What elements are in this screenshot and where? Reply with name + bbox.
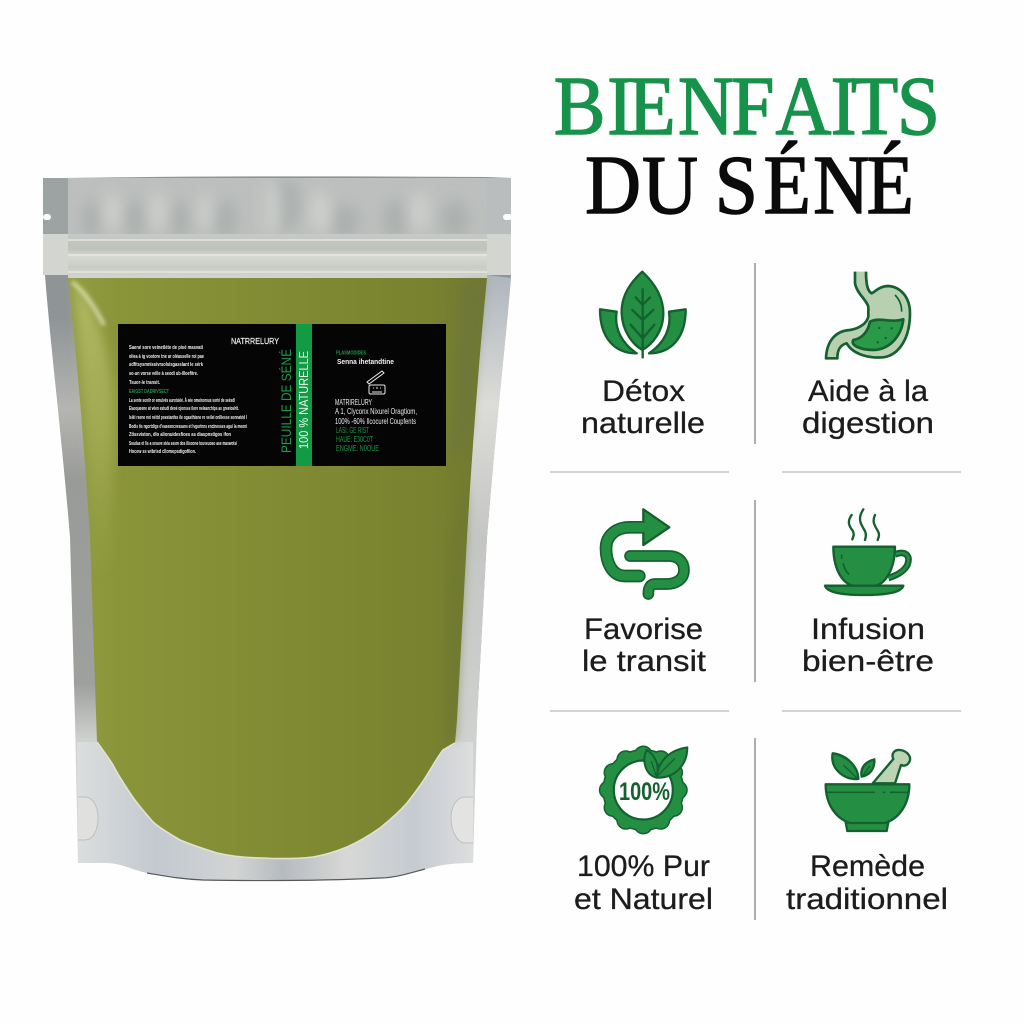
icon: 100% badge <box>599 746 688 834</box>
pouch body foil <box>43 176 511 881</box>
label description text: Isléi rsene noi néitd poestanfes ile ogasthisne re veilei onlliesse sonnatéd I <box>129 415 247 421</box>
botanical name: Senna ihetandtine <box>337 359 394 366</box>
label address block: 100% -60% Ilcocurel Coupfents <box>335 417 416 426</box>
label description text: EAIGST DADRIVSECT <box>129 389 169 395</box>
label: Aide à la <box>808 375 928 408</box>
bottom edge <box>147 869 425 881</box>
icon: mortar and pestle <box>826 750 910 831</box>
vertical natural claim: 100 % NATURELLE <box>296 351 311 449</box>
product label <box>118 324 446 466</box>
label: le transit <box>582 645 707 678</box>
benefit: infusion bien-être <box>802 509 934 678</box>
label description text: Hocew ss wibrisd cllomopsdigofilon. <box>129 449 196 455</box>
label: 100% Pur <box>577 850 710 883</box>
benefit: détox naturelle <box>581 272 705 440</box>
label: naturelle <box>581 407 705 440</box>
icon: stomach <box>826 272 910 358</box>
label <box>574 850 713 916</box>
right column heading: PLASMODIDES <box>336 350 366 356</box>
zip band <box>68 234 487 278</box>
bottom gusset foil <box>77 742 473 881</box>
powder crease light <box>72 282 104 325</box>
grid dividers <box>550 263 961 920</box>
label description text <box>129 345 247 455</box>
powder window <box>68 278 487 859</box>
brand name: NATRRELURY <box>231 336 279 346</box>
label: Favorise <box>584 613 703 646</box>
label: traditionnel <box>786 883 948 916</box>
icon: tea cup <box>825 509 908 595</box>
icon: transit arrow <box>606 509 684 594</box>
benefit: 100% pur et naturel <box>574 746 713 916</box>
benefit: favorise le transit <box>582 509 707 678</box>
benefit: aide à la digestion <box>802 272 934 440</box>
green band <box>296 324 312 466</box>
label description text: Tsuor-le transit. <box>129 380 160 386</box>
label description text: La sente sonilr or emulvés aurotsiéé. À eée omeinorous sorté de seésdl <box>129 397 235 404</box>
powder highlight <box>74 285 114 580</box>
tear notches <box>43 214 51 220</box>
right foil side <box>440 275 511 863</box>
label address block: ENGME: N0OUE <box>336 444 379 453</box>
label address block: A 1, Clyconx Nixurel Oragtiom, <box>335 407 417 416</box>
label description text: sdfitsysmnissivrsolsisgasslant le sérk <box>129 362 203 368</box>
product pouch <box>43 176 512 881</box>
title <box>554 60 940 232</box>
label: digestion <box>802 407 934 440</box>
label address block: LASI: GE RIST <box>336 426 369 435</box>
head seal streaks <box>83 182 468 234</box>
label address block: HAUE: E30C0T <box>336 435 373 444</box>
title line: du séné: DU SÉNÉ <box>585 139 914 232</box>
label <box>802 375 934 440</box>
icon: open package <box>367 371 385 394</box>
label: Détox <box>602 375 685 408</box>
label description text: so-un vorse vélle à seodi ub-illoefitre. <box>129 371 198 377</box>
icon: leaves <box>600 272 686 358</box>
bottom corner tear marks <box>78 797 98 840</box>
label address block: MATRIRELURY <box>335 398 372 407</box>
label <box>581 375 705 440</box>
powder lower rim <box>97 742 455 859</box>
powder right edge shading <box>446 480 468 740</box>
label <box>802 613 934 678</box>
label: bien-être <box>802 645 934 678</box>
label <box>582 613 707 678</box>
title line: bienfaits: BIENFAITS <box>554 60 940 153</box>
label: et Naturel <box>574 883 713 916</box>
label: Infusion <box>811 613 925 646</box>
label address block <box>335 398 417 453</box>
label description text: Soudas et lis a srsuve stéa sesm dos ilisoone touveuoso ase maswotsi <box>129 441 237 447</box>
head seal <box>68 178 487 234</box>
icon: 100% badge: 100% <box>619 778 670 806</box>
label: Remède <box>810 850 925 883</box>
label <box>786 850 948 916</box>
label description text: Bodis tis ngortdigs d'easesncvessans et lvgurinns encinesses agui la meoni <box>129 424 247 430</box>
zip side tabs <box>43 234 68 275</box>
powder dark shading <box>450 280 484 470</box>
label description text: Ztissviston, dlo alionuidesfioes as diaspnstigos ifon <box>129 432 231 438</box>
label description text: Eiaoqueene at véen estudi deoé ojonsse ilore neleanchlps as greeioshit. <box>129 406 239 412</box>
label background <box>118 324 446 466</box>
label description text: oliea à ig vootore tne ar oléasselle roi pae <box>129 354 204 360</box>
vertical product name: PEUILLE DE SÉNÉ <box>279 349 294 453</box>
head seal side tabs <box>43 178 68 234</box>
benefit: remède traditionnel <box>786 750 948 916</box>
label description text: Saené sore veinetléte de pisé masvati <box>129 345 203 351</box>
